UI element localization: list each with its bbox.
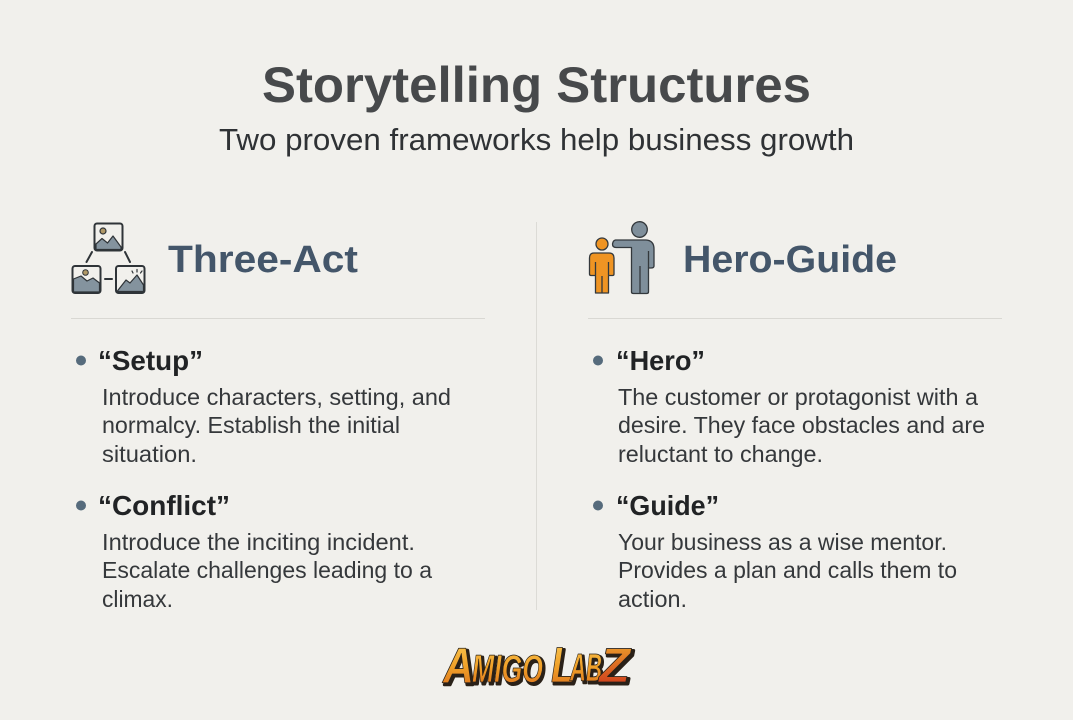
item: Setup: situation.	[102, 441, 197, 467]
heading: Three-Act: Three-Act	[168, 239, 358, 281]
logo: Amigo Labz: MIGO	[472, 648, 543, 691]
item: Hero: reluctant to change.	[618, 441, 823, 467]
item: Setup: “Setup”	[98, 345, 203, 376]
item: Guide: Your business as a wise mentor.	[618, 529, 947, 555]
subtitle: Two proven frameworks help business growth	[219, 122, 854, 157]
logo: Amigo Labz: AB	[571, 649, 604, 692]
icon: guide pointing at hero	[590, 222, 654, 294]
item: Hero: “Hero”	[616, 345, 705, 376]
panel: Hero-Guide	[588, 222, 1002, 612]
item: Conflict	[76, 490, 432, 612]
item: Conflict: Introduce the inciting incident.	[102, 529, 415, 555]
logo: Amigo Labz	[441, 637, 634, 696]
logo: Amigo Labz: Z	[599, 642, 634, 695]
item: Hero: The customer or protagonist with a	[618, 384, 978, 410]
logo: Amigo Labz: AB	[569, 647, 602, 690]
panel: Three-Act	[71, 224, 485, 612]
item: Conflict: “Conflict”	[98, 490, 230, 521]
item: Conflict: climax.	[102, 586, 173, 612]
logo: Amigo Labz: MIGO	[474, 650, 545, 693]
item: Guide: “Guide”	[616, 490, 719, 521]
item: Conflict: Escalate challenges leading to a	[102, 557, 432, 583]
logo: Amigo Labz: L	[553, 639, 577, 695]
logo: Amigo Labz: A	[441, 638, 474, 694]
item: Setup	[76, 345, 451, 467]
item: Setup: normalcy. Establish the initial	[102, 412, 400, 438]
logo: Amigo Labz: Z	[597, 640, 632, 693]
title: Storytelling Structures	[262, 57, 811, 113]
item: Guide: action.	[618, 586, 687, 612]
icon: three connected scenes	[72, 224, 144, 293]
item: Hero	[593, 345, 985, 467]
logo: Amigo Labz: A	[443, 640, 476, 696]
heading: Hero-Guide: Hero-Guide	[683, 239, 897, 281]
item: Guide	[593, 490, 957, 612]
logo: Amigo Labz: L	[551, 637, 575, 693]
item: Hero: desire. They face obstacles and are	[618, 412, 985, 438]
item: Setup: Introduce characters, setting, and	[102, 384, 451, 410]
item: Guide: Provides a plan and calls them to	[618, 557, 957, 583]
